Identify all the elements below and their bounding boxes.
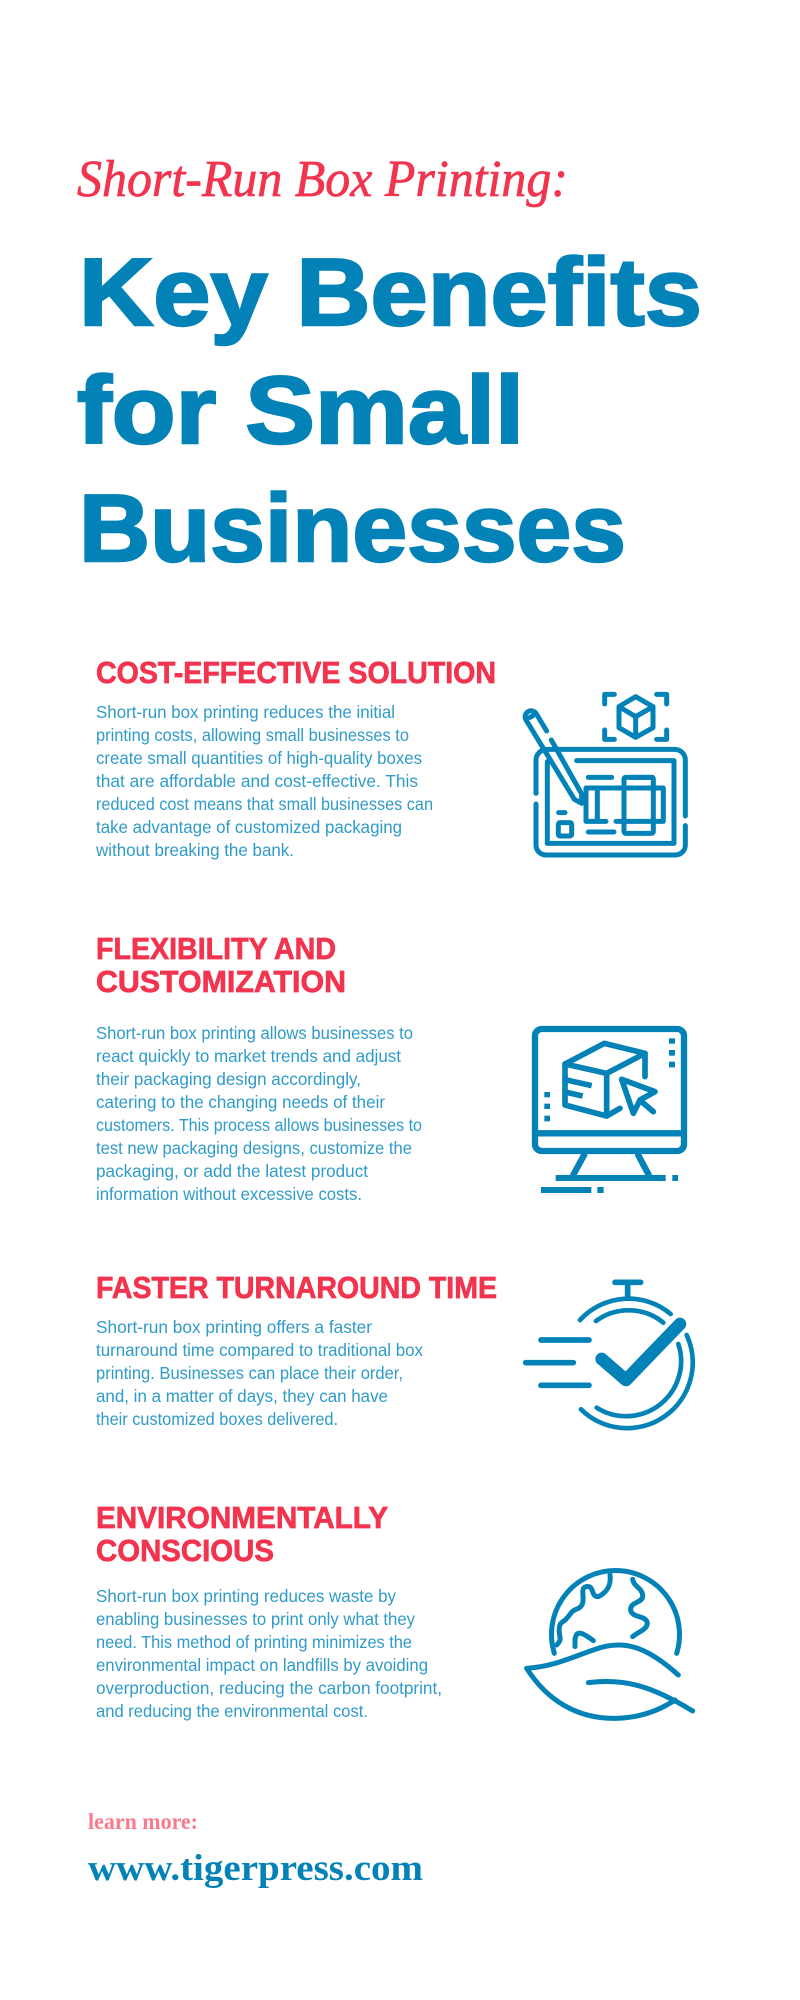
heading: flexibility and customization: CUSTOMIZATION	[96, 965, 346, 999]
panel: cost-effective solution	[95, 656, 685, 860]
text block: cost-effective body: Short-run box printing reduces the initial	[96, 702, 395, 722]
text block: turnaround body: Short-run box printing offers a faster	[96, 1317, 372, 1337]
text block: cost-effective body	[95, 702, 433, 860]
icon: tablet with pen and box	[525, 694, 685, 855]
footer link: website: www.tigerpress.com	[88, 1848, 423, 1889]
title: for Small	[77, 357, 524, 464]
text block: environment body: and reducing the environmental cost.	[96, 1701, 368, 1721]
heading: faster turnaround time: FASTER TURNAROUND TIME	[96, 1271, 497, 1305]
icon: globe and leaf	[527, 1571, 693, 1718]
text block: cost-effective body: reduced cost means that small businesses can	[96, 794, 433, 814]
panel: flexibility and customization	[96, 932, 684, 1204]
text block: environment body: enabling businesses to print only what they	[96, 1609, 415, 1629]
text block: environment body	[96, 1586, 442, 1721]
text block: cost-effective body: take advantage of customized packaging	[96, 817, 402, 837]
text block: flexibility body: Short-run box printing allows businesses to	[96, 1023, 413, 1043]
title	[77, 239, 702, 582]
heading: flexibility and customization	[96, 932, 346, 999]
text block: flexibility body: customers. This process allows businesses to	[96, 1115, 422, 1135]
text block: turnaround body: and, in a matter of days, they can have	[96, 1386, 388, 1406]
text block: cost-effective body: create small quantities of high-quality boxes	[96, 748, 422, 768]
heading: environmentally conscious	[96, 1501, 388, 1568]
text block: turnaround body: their customized boxes delivered.	[96, 1409, 338, 1429]
text block: cost-effective body: without breaking the bank.	[95, 840, 294, 860]
text block: environment body: overproduction, reducing the carbon footprint,	[96, 1678, 442, 1698]
text block: environment body: need. This method of printing minimizes the	[96, 1632, 412, 1652]
title: Key Benefits	[79, 239, 702, 346]
text block: turnaround body	[96, 1317, 423, 1429]
text block: turnaround body: turnaround time compared to traditional box	[96, 1340, 423, 1360]
footer label: learn more: learn more:	[88, 1809, 198, 1834]
text block: flexibility body: react quickly to market trends and adjust	[96, 1046, 401, 1066]
heading: flexibility and customization: FLEXIBILITY AND	[96, 932, 336, 966]
text block: flexibility body	[96, 1023, 422, 1204]
text block: flexibility body: catering to the changing needs of their	[96, 1092, 385, 1112]
panel: environmentally conscious	[96, 1501, 693, 1721]
text block: flexibility body: packaging, or add the latest product	[96, 1161, 368, 1181]
text block: environment body: environmental impact on landfills by avoiding	[96, 1655, 428, 1675]
text block: turnaround body: printing. Businesses can place their order,	[96, 1363, 403, 1383]
panel: faster turnaround time	[96, 1271, 693, 1429]
subtitle: Short-Run Box Printing:	[77, 151, 568, 208]
icon: monitor with box and cursor	[535, 1029, 684, 1193]
heading: environmentally conscious: ENVIRONMENTALLY	[96, 1501, 388, 1535]
text block: flexibility body: test new packaging designs, customize the	[96, 1138, 412, 1158]
heading: cost-effective solution: COST-EFFECTIVE SOLUTION	[96, 656, 496, 690]
text block: flexibility body: their packaging design accordingly,	[96, 1069, 361, 1089]
text block: cost-effective body: printing costs, allowing small businesses to	[96, 725, 409, 745]
text block: environment body: Short-run box printing reduces waste by	[96, 1586, 396, 1606]
text block: cost-effective body: that are affordable and cost-effective. This	[96, 771, 418, 791]
text block: flexibility body: information without excessive costs.	[96, 1184, 362, 1204]
title: Businesses	[79, 475, 626, 582]
heading: environmentally conscious: CONSCIOUS	[96, 1534, 274, 1568]
icon: stopwatch with check mark	[526, 1282, 693, 1428]
